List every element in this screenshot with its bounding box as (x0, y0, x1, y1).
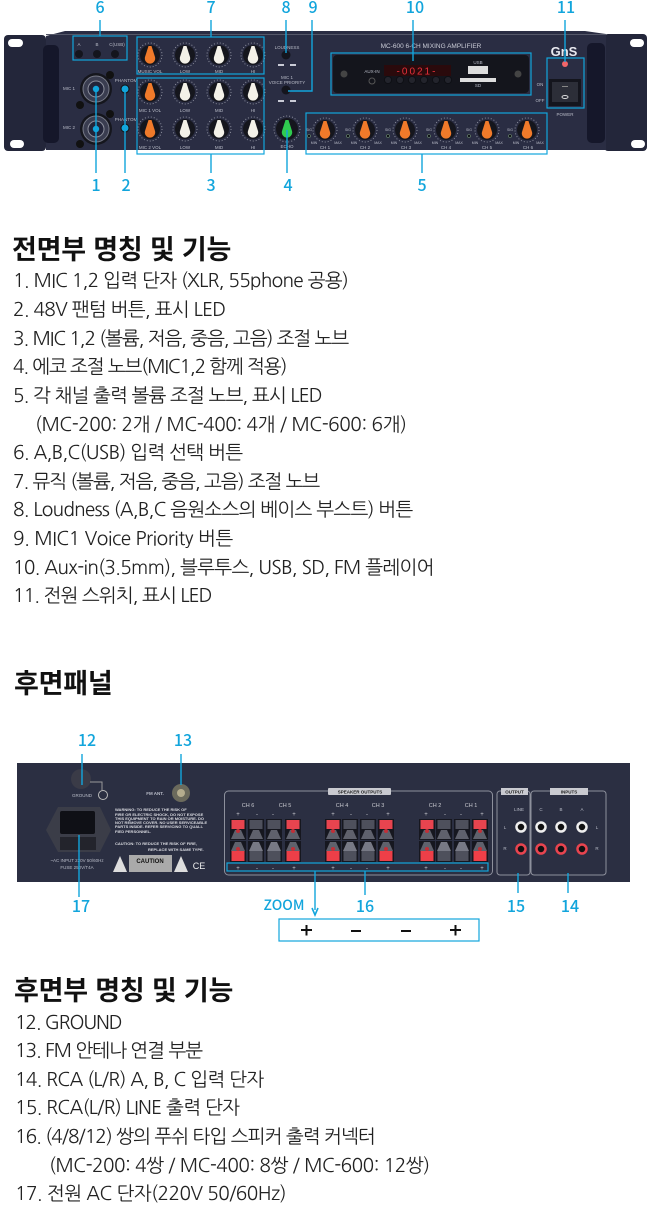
speaker outputs: + (424, 866, 428, 872)
warning text: WARNING: TO REDUCE THE RISK OF (115, 807, 187, 812)
channel knobs: MAX (334, 141, 342, 145)
channel knobs: MIN (391, 141, 398, 145)
caution label (113, 855, 205, 872)
list: front functions: 7. 뮤직 (볼륨, 저음, 중음, 고음) 조절 노브 (13, 472, 319, 491)
list: rear functions: 14. RCA (L/R) A, B, C 입력 단자 (15, 1070, 264, 1089)
channel knobs: MIN (311, 141, 318, 145)
list: front functions: 6. A,B,C(USB) 입력 선택 버튼 (13, 443, 242, 462)
loudness and priority buttons: MIC 1 (281, 75, 293, 80)
rear numbers: 13 (174, 727, 192, 751)
rear panel photo (17, 727, 630, 942)
speaker outputs: - (460, 866, 462, 872)
warning text: FIED PERSONNEL. (115, 829, 151, 834)
output and input RCA jacks (497, 788, 606, 875)
channel knobs: SIG (466, 128, 472, 132)
chassis (4, 31, 647, 151)
channel knobs: SIG (385, 128, 391, 132)
speaker outputs: CH 5 (279, 803, 291, 809)
rear numbers: 14 (561, 893, 579, 917)
mic knobs (138, 80, 265, 150)
output and input RCA jacks: LINE (514, 807, 524, 812)
speaker outputs: - (272, 812, 274, 818)
mic knobs: LOW (180, 145, 191, 150)
channel knobs: MAX (495, 141, 503, 145)
speaker outputs: + (386, 812, 390, 818)
speaker outputs: + (236, 866, 240, 872)
speaker outputs: - (272, 866, 274, 872)
echo knob: ECHO (280, 144, 294, 149)
media player: USB (473, 60, 483, 65)
speaker outputs (224, 788, 492, 875)
speaker outputs: - (350, 866, 352, 872)
speaker outputs: - (366, 866, 368, 872)
list: front functions: 2. 48V 팬텀 버튼, 표시 LED (13, 300, 225, 319)
speaker outputs: CH 4 (336, 803, 348, 809)
list: front functions (13, 271, 434, 605)
leader lines (96, 20, 565, 173)
caution label: CAUTION (136, 859, 164, 865)
list: rear functions: (MC-200: 4쌍 / MC-400: 8쌍 / MC-600: 12쌍) (49, 1156, 430, 1175)
music knobs: HI (251, 69, 255, 74)
FM antenna (146, 784, 190, 802)
logo: GnS (551, 44, 578, 59)
front panel photo (4, 0, 647, 196)
media player (333, 43, 529, 93)
rear numbers: 15 (507, 893, 525, 917)
speaker outputs: - (444, 866, 446, 872)
list: front functions: 10. Aux-in(3.5mm), 블루투스, USB, SD, FM 플레이어 (13, 558, 434, 577)
loudness and priority buttons: LOUDNESS (275, 45, 299, 50)
channel knobs: SIG (345, 128, 351, 132)
speaker outputs: CH 2 (429, 803, 441, 809)
music knobs: MID (215, 69, 224, 74)
speaker outputs: + (292, 812, 296, 818)
rear chassis (17, 763, 630, 882)
output and input RCA jacks: INPUTS (561, 790, 577, 794)
AC inlet: ~AC INPUT 220V 50/60Hz (50, 858, 104, 863)
loudness and priority buttons: VOICE PRIORITY (269, 80, 305, 85)
power switch: POWER (556, 112, 574, 117)
speaker outputs: SPEAKER OUTPUTS (338, 790, 382, 794)
channel knobs: SIG (306, 128, 312, 132)
channel knobs: CH 2 (360, 145, 371, 150)
mic sockets: MIC 2 (63, 125, 75, 130)
list: front functions: (MC-200: 2개 / MC-400: 4개 / MC-600: 6개) (35, 415, 406, 434)
speaker outputs: - (256, 812, 258, 818)
list: front functions: 4. 에코 조절 노브(MIC1,2 함께 적용) (13, 357, 286, 376)
numbers (91, 0, 575, 196)
ground (71, 769, 108, 800)
warning text: CAUTION: TO REDUCE THE RISK OF FIRE, (115, 841, 197, 846)
output and input RCA jacks: L (504, 825, 507, 830)
output and input RCA jacks: L (596, 825, 599, 830)
channel knobs: MAX (536, 141, 544, 145)
zoom box (279, 919, 479, 941)
list: rear functions: 15. RCA(L/R) LINE 출력 단자 (15, 1098, 239, 1117)
rear numbers: ZOOM (264, 895, 304, 915)
list: rear functions: 16. (4/8/12) 쌍의 푸쉬 타입 스피커 출력 커넥터 (15, 1127, 375, 1146)
numbers: 4 (283, 172, 293, 196)
phantom buttons (115, 78, 137, 132)
speaker outputs: + (236, 812, 240, 818)
input select buttons: C(USB) (109, 42, 125, 47)
list: front functions: 8. Loudness (A,B,C 음원소스의 베이스 부스트) 버튼 (13, 500, 412, 519)
caution label: CE (193, 861, 205, 871)
heading: rear functions: 후면부 명칭 및 기능 (14, 969, 233, 1008)
list: rear functions (15, 1013, 430, 1203)
input select buttons: B (95, 42, 99, 47)
output and input RCA jacks: OUTPUT (505, 790, 524, 794)
numbers: 2 (121, 172, 131, 196)
music knobs: MUSIC VOL (138, 69, 163, 74)
mic sockets (63, 71, 114, 148)
speaker outputs: - (256, 866, 258, 872)
channel knobs: SIG (426, 128, 432, 132)
mic knobs: MIC 1 VOL (139, 108, 162, 113)
output and input RCA jacks: A (580, 807, 584, 812)
output and input RCA jacks: R (595, 846, 599, 851)
speaker outputs: - (444, 812, 446, 818)
FM antenna: FM ANT. (146, 791, 164, 796)
channel knobs: CH 5 (482, 145, 493, 150)
list: front functions: 9. MIC1 Voice Priority 버튼 (13, 529, 233, 548)
speaker outputs: + (386, 866, 390, 872)
channel knobs: MIN (351, 141, 358, 145)
power switch: ON (537, 82, 543, 87)
AC inlet: FUSE 250V/T4A (60, 865, 94, 870)
warning text: THIS EQUIPMENT TO RAIN OR MOISTURE. DO (115, 816, 204, 821)
numbers: 5 (417, 172, 427, 196)
loudness and priority buttons (269, 45, 305, 102)
list: rear functions: 13. FM 안테나 연결 부분 (15, 1041, 202, 1060)
mic knobs: LOW (180, 108, 191, 113)
channel knobs: MAX (414, 141, 422, 145)
numbers: 3 (206, 172, 216, 196)
channel knobs: MAX (374, 141, 382, 145)
speaker outputs: + (331, 812, 335, 818)
list: front functions: 3. MIC 1,2 (볼륨, 저음, 중음, 고음) 조절 노브 (13, 329, 348, 348)
speaker outputs: - (350, 812, 352, 818)
warning text: NOT REMOVE COVER. NO USER SERVICEABLE (115, 820, 207, 825)
power switch (536, 61, 581, 117)
input select buttons: A (77, 42, 81, 47)
mic sockets: MIC 1 (63, 86, 75, 91)
speaker outputs: CH 6 (242, 803, 254, 809)
channel knobs: MIN (472, 141, 479, 145)
mic knobs: HI (251, 108, 255, 113)
channel knobs: CH 1 (320, 145, 331, 150)
mic knobs: MID (215, 108, 224, 113)
phantom buttons: PHANTOM (115, 78, 137, 83)
speaker outputs: - (366, 812, 368, 818)
mic knobs: MID (215, 145, 224, 150)
output and input RCA jacks: B (559, 807, 563, 812)
channel knobs (306, 118, 544, 150)
rear numbers: 16 (356, 893, 374, 917)
media player: AUX-IN (364, 69, 380, 74)
list: front functions: 1. MIC 1,2 입력 단자 (XLR, 55phone 공용) (13, 271, 348, 290)
channel knobs: CH 4 (441, 145, 452, 150)
mic knobs: MIC 2 VOL (139, 145, 162, 150)
speaker outputs: CH 3 (372, 803, 384, 809)
channel knobs: MIN (513, 141, 520, 145)
highlight boxes (73, 36, 584, 154)
output and input RCA jacks: C (539, 807, 543, 812)
heading: rear panel: 후면패널 (14, 662, 113, 701)
mic knobs: HI (251, 145, 255, 150)
ground: GROUND (72, 793, 93, 798)
music knobs (138, 43, 265, 74)
channel knobs: SIG (507, 128, 513, 132)
speaker outputs: + (292, 866, 296, 872)
media player: SD (475, 83, 482, 88)
warning text: REPLACE WITH SAME TYPE. (148, 847, 204, 852)
speaker outputs: + (480, 812, 484, 818)
rear numbers: 12 (78, 727, 96, 751)
echo knob (274, 116, 300, 149)
rear leader lines (79, 754, 568, 915)
numbers: 1 (91, 172, 101, 196)
list: front functions: 11. 전원 스위치, 표시 LED (13, 586, 212, 605)
AC inlet (46, 807, 111, 870)
media player: -0021- (397, 66, 437, 78)
speaker outputs: + (424, 812, 428, 818)
channel knobs: MAX (455, 141, 463, 145)
channel knobs: MIN (432, 141, 439, 145)
media player: MC-600 6-CH MIXING AMPLIFIER (381, 43, 482, 50)
speaker outputs: + (331, 866, 335, 872)
rear numbers: 17 (72, 893, 90, 917)
warning text: FIRE OR ELECTRIC SHOCK, DO NOT EXPOSE (115, 812, 204, 817)
power switch: OFF (536, 98, 545, 103)
rear numbers (72, 727, 579, 917)
channel knobs: CH 6 (523, 145, 534, 150)
heading: front: 전면부 명칭 및 기능 (12, 228, 231, 267)
warning text: PARTS INSIDE. REFER SERVICING TO QUALI- (115, 824, 204, 829)
speaker outputs: CH 1 (465, 803, 477, 809)
speaker outputs: - (460, 812, 462, 818)
phantom buttons: PHANTOM (115, 117, 137, 122)
music knobs: LOW (180, 69, 191, 74)
input select buttons (75, 42, 125, 58)
list: rear functions: 12. GROUND (15, 1013, 121, 1032)
list: rear functions: 17. 전원 AC 단자(220V 50/60Hz) (15, 1184, 286, 1203)
output and input RCA jacks: R (503, 846, 507, 851)
list: front functions: 5. 각 채널 출력 볼륨 조절 노브, 표시 LED (13, 386, 322, 405)
speaker outputs: + (480, 866, 484, 872)
warning text (115, 807, 207, 852)
channel knobs: CH 3 (401, 145, 412, 150)
